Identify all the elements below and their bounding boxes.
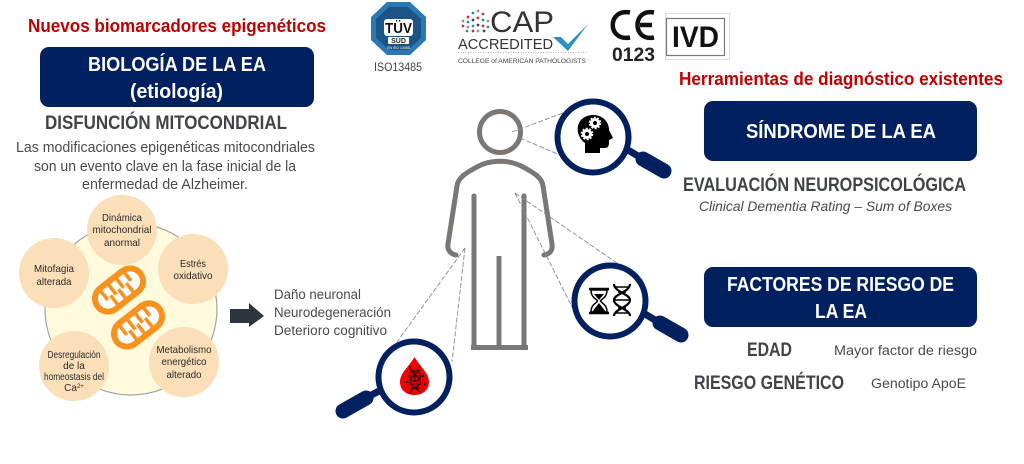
bubble: estrés oxidativo: Estrés [180, 258, 206, 270]
text: riesgo genético: RIESGO GENÉTICO [694, 372, 844, 394]
bubble: desregulación: Desregulación [48, 350, 100, 361]
figure: human outline [448, 112, 552, 348]
icon: blood drop with dna [400, 357, 429, 395]
panel: síndrome de la EA: SÍNDROME DE LA EA [746, 120, 936, 143]
text: ISO13485: ISO13485 [374, 62, 422, 74]
connector lines: hand [397, 248, 465, 362]
logo: CAP accredited: CAP [490, 6, 554, 39]
bubble: desregulación: homeostasis del [44, 372, 104, 383]
text block: descripción: Las modificaciones epigenéticas mitocondriales [16, 140, 315, 156]
bubble: metabolismo [149, 327, 219, 397]
panel: factores de riesgo [704, 267, 977, 327]
text block: consecuencias: Daño neuronal [274, 287, 361, 302]
text block: consecuencias: Deterioro cognitivo [274, 323, 387, 338]
icon: hourglass [589, 289, 609, 313]
text: edad [747, 340, 977, 361]
logo: IVD: IVD [672, 21, 719, 54]
logo: CAP accredited: COLLEGE of AMERICAN PATHOLOGISTS [458, 58, 587, 65]
logo: IVD [666, 14, 730, 60]
text: riesgo genético [694, 372, 966, 394]
magnifier: blood icon [343, 342, 450, 412]
icon: brain gears head [578, 115, 613, 153]
bubble: mitofagia: Mitofagia [34, 263, 74, 275]
connector lines: head [512, 113, 563, 155]
bubble: metabolismo: Metabolismo [156, 344, 212, 356]
panel: síndrome de la EA [704, 101, 977, 161]
logo: CE 0123: 0123 [612, 45, 655, 66]
logo: TÜV SÜD: EN ISO 13485 [387, 46, 410, 50]
text block: descripción: enfermedad de Alzheimer. [82, 177, 248, 193]
logo: TÜV SÜD: TÜV [385, 20, 412, 37]
text: edad: EDAD [747, 340, 792, 361]
logo: CE 0123 [612, 12, 655, 66]
text: clinical dementia rating: Clinical Dementia Rating – Sum of Boxes [699, 198, 952, 214]
bubble: metabolismo: energético [162, 356, 207, 368]
bubble: desregulación: 2+ [77, 384, 84, 390]
connector lines: torso [515, 193, 617, 307]
bubble: dinámica mitocondrial [87, 195, 157, 265]
bubble: desregulación [39, 331, 109, 401]
text: edad: Mayor factor de riesgo [834, 343, 977, 358]
bubble: mitofagia: alterada [36, 276, 72, 288]
panel: biología de la EA: BIOLOGÍA DE LA EA [88, 53, 266, 76]
text block: descripción: son un evento clave en la fase inicial de la [34, 159, 297, 175]
logo: CAP accredited [458, 6, 588, 65]
bubble: estrés oxidativo [158, 234, 228, 304]
panel: biología de la EA [40, 47, 314, 107]
bubble: desregulación: Ca [64, 383, 77, 394]
panel: factores de riesgo: FACTORES DE RIESGO DE [727, 274, 954, 296]
heading: evaluación neuropsicológica: EVALUACIÓN NEUROPSICOLÓGICA [683, 174, 966, 196]
logo: CAP accredited: ACCREDITED [458, 37, 553, 53]
icon: mitochondrion lower [105, 294, 171, 356]
magnifier: head icon [558, 102, 664, 172]
bubble: dinámica mitocondrial: mitochondrial [92, 224, 152, 236]
text block: consecuencias: Neurodegeneración [274, 305, 391, 320]
icon: mitochondrion upper [86, 259, 152, 321]
heading: disfunción mitocondrial: DISFUNCIÓN MITOCONDRIAL [45, 112, 287, 134]
text block: consecuencias [274, 287, 391, 338]
left heading: nuevos biomarcadores: Nuevos biomarcadores epigenéticos [28, 16, 326, 36]
logo: TÜV SÜD: SÜD [391, 36, 406, 45]
bubble: mitofagia [19, 238, 89, 308]
bubble: desregulación: de la [63, 361, 85, 372]
text block: descripción [16, 140, 315, 193]
diagram: mitochondrial dysfunction circle [19, 195, 228, 401]
text: riesgo genético: Genotipo ApoE [871, 376, 966, 391]
arrow: to consequences [230, 303, 264, 327]
panel: factores de riesgo: LA EA [815, 301, 867, 323]
bubble: dinámica mitocondrial: anormal [104, 237, 140, 249]
icon: dna helix [614, 284, 630, 316]
bubble: estrés oxidativo: oxidativo [174, 270, 213, 282]
right heading: herramientas de diagnóstico: Herramientas de diagnóstico existentes [679, 69, 1003, 89]
magnifier: age and genetics icon [574, 266, 681, 336]
bubble: dinámica mitocondrial: Dinámica [102, 212, 142, 224]
logo: TÜV SÜD [371, 2, 426, 74]
panel: biología de la EA: (etiología) [130, 81, 223, 103]
bubble: metabolismo: alterado [166, 369, 202, 381]
